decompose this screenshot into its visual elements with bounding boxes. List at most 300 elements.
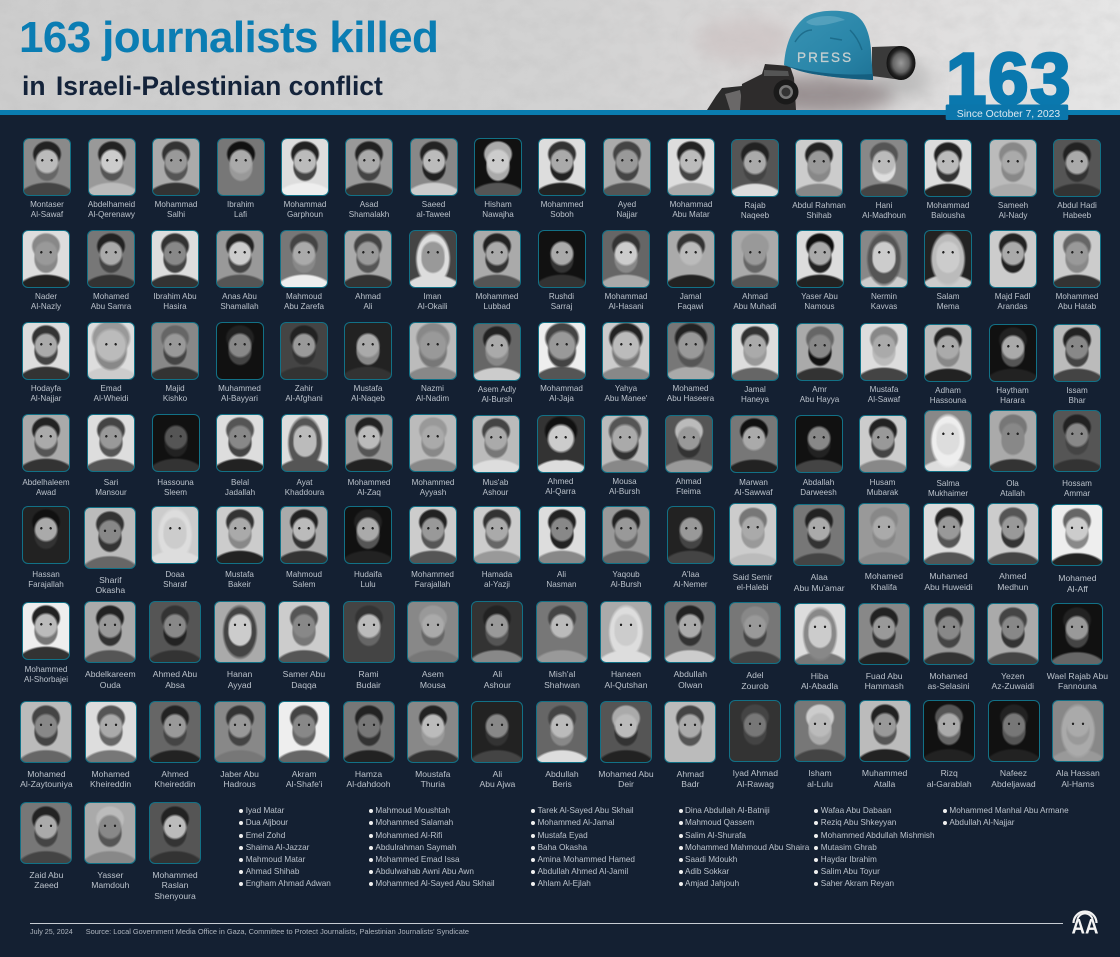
card: Nader Al-Nazly: [22, 230, 70, 310]
card: Jamal Haneya: Jamal: [744, 384, 766, 394]
card: Wael Rajab Abu Fannouna: [1051, 603, 1103, 692]
card: Salam Mema: [924, 230, 972, 311]
card: Mustafa Al-Naqeb: [344, 322, 392, 404]
card: Yezen Az-Zuwaidi: [987, 603, 1039, 692]
card: Abdelkareem Ouda: Ouda: [100, 680, 121, 690]
card: Rajab Naqeeb: Naqeeb: [741, 211, 769, 220]
card: Hassan Farajallah: Hassan: [32, 570, 60, 579]
card: Mohamed Abu Samra: [87, 230, 135, 310]
card: Majid Kishko: [151, 322, 199, 403]
card: Hisham Nawajha: Nawajha: [482, 210, 514, 218]
name list: column 5: Haydar Ibrahim: [821, 855, 877, 864]
card: Ahmad Badr: [664, 701, 716, 790]
card: Zahir Al-Afghani: Al-Afghani: [285, 394, 323, 403]
name list: column 2: Abdulrahman Saymah: [375, 843, 456, 852]
card: Mohammad Al-Hasani: [602, 230, 650, 310]
card: Moustafa Thuria: Moustafa: [415, 769, 450, 779]
card: Abdullah Olwan: Olwan: [678, 680, 702, 690]
card: Ahmed Abu Absa: Absa: [165, 680, 185, 690]
card: Asad Shamalakh: [345, 138, 393, 218]
card: Mohammed Raslan Shenyoura: Raslan: [162, 880, 188, 890]
name list: column 3: Mustafa Eyad: [538, 830, 588, 840]
card: Abdelhaleem Awad: Abdelhaleem: [22, 478, 70, 486]
card: Akram Al-Shafe'i: Al-Shafe'i: [286, 779, 322, 789]
card: Ayed Najjar: [603, 138, 651, 218]
icon: camera: [707, 64, 798, 110]
card: Mohammed Ayyash: Ayyash: [420, 488, 446, 496]
big number 163: 163: [946, 39, 1072, 120]
card: Muhammed Atalla: Atalla: [874, 778, 895, 788]
card: Hudaifa Lulu: Hudaifa: [354, 570, 382, 579]
card: Ali Ashour: [471, 601, 523, 690]
helmet label: PRESS: [797, 50, 853, 65]
card: Ahmad Ali: Ali: [364, 302, 372, 310]
card: Mohammed Al-Zaq: Mohammed: [348, 478, 390, 486]
card: Hamada al-Yazji: [473, 506, 521, 590]
card: Asem Mousa: Mousa: [420, 680, 446, 690]
card: Rami Budair: [342, 601, 394, 690]
card: Muhamed Abu Huweidi: [922, 503, 974, 592]
card: Ola Atallah: Atallah: [1000, 489, 1025, 498]
card: Ahmed Medhun: Medhun: [997, 582, 1028, 592]
card: Montaser Al-Sawaf: Montaser: [30, 200, 64, 208]
card: Ali Abu Ajwa: Abu Ajwa: [479, 779, 515, 789]
card: Muhammed Atalla: [859, 700, 911, 789]
card: Ibrahim Lafi: [217, 138, 265, 218]
card: Mustafa Al-Naqeb: Al-Naqeb: [351, 394, 385, 403]
card: Hodayfa Al-Najjar: [22, 322, 70, 403]
card: Muhammed Al-Bayyari: [216, 322, 264, 403]
card: Mohamed Kheireddin: [85, 701, 137, 790]
card: Ali Ashour: Ashour: [484, 680, 511, 690]
card: Majid Kishko: Kishko: [163, 394, 187, 403]
card: Mohamed Khalifa: [858, 503, 910, 592]
card: Abdul Rahman Shihab: Abdul Rahman: [792, 201, 846, 210]
card: Ahmed Kheireddin: Kheireddin: [154, 779, 196, 789]
name list: column 5: Saher Akram Reyan: [821, 879, 894, 888]
logo: AA: [1071, 906, 1099, 934]
card: Mohammad Salhi: Mohammad: [155, 200, 197, 208]
card: Wael Rajab Abu Fannouna: Wael Rajab Abu: [1047, 671, 1108, 681]
card: Muhammed Al-Bayyari: Al-Bayyari: [221, 394, 258, 403]
card: Mohammed Ayyash: Mohammed: [412, 478, 454, 486]
card: Nermin Kavvas: Nermin: [871, 292, 897, 301]
name list: column 1: Mahmoud Matar: [246, 855, 305, 864]
card: Salam Mema: Salam: [937, 292, 959, 301]
card: Mohamed Al-Aff: [1051, 504, 1103, 594]
card: Ahmed Abu Absa: Ahmed Abu: [153, 669, 197, 679]
card: Abdallah Darweesh: Darweesh: [800, 488, 837, 497]
name list: column 4: Mahmoud Qassem: [685, 818, 754, 827]
card: Nafeez Abdeljawad: Nafeez: [1000, 768, 1027, 778]
card: Mohammed Lubbad: Lubbad: [483, 302, 510, 310]
name list: column 3: Amina Mohammed Hamed: [538, 855, 635, 864]
card: Amr Abu Hayya: [796, 322, 844, 404]
card: Haytham Harara: Harara: [1000, 396, 1025, 405]
name list: column 5: Reziq Abu Shkeyyan: [821, 818, 896, 827]
card: Mohammed Lubbad: Mohammed: [476, 292, 518, 300]
card: Mustafa Al-Sawaf: [860, 322, 908, 404]
card: Jamal Faqawi: [667, 230, 715, 310]
card: Yaser Abu Namous: Namous: [804, 302, 835, 311]
card: Majd Fadl Arandas: Arandas: [997, 302, 1028, 311]
card: Nader Al-Nazly: Nader: [35, 292, 57, 300]
card: Muhammed Al-Bayyari: Muhammed: [218, 384, 261, 393]
name list: column 2: Mohammed Al-Sayed Abu Skhail: [375, 879, 495, 888]
card: Mohamed Abu Haseera: Mohamed: [672, 384, 708, 393]
card: Mus'ab Ashour: [472, 415, 520, 498]
card: Ibrahim Abu Hasira: Hasira: [163, 302, 187, 310]
card: Salma Mukhaimer: [924, 410, 972, 499]
card: Asem Mousa: [407, 601, 459, 690]
card: Samer Abu Daqqa: [278, 601, 330, 690]
card: Said Semir el-Halebi: [729, 503, 777, 593]
card: Hiba Al-Abadla: Hiba: [811, 671, 828, 681]
card: Ayat Khaddoura: Khaddoura: [285, 488, 324, 496]
card: Nazmi Al-Nadim: Al-Nadim: [416, 394, 449, 403]
card: Haytham Harara: Haytham: [996, 386, 1029, 395]
card: Abdullah Olwan: [664, 601, 716, 690]
card: Mohamed Abu Deir: [600, 701, 652, 790]
card: Mish'al Shahwan: [536, 601, 588, 690]
card: Mustafa Al-Naqeb: Mustafa: [354, 384, 382, 393]
card: Hanan Ayyad: Ayyad: [228, 680, 251, 690]
card: Mohammed Lubbad: [473, 230, 521, 310]
card: Mohamed Abu Deir: Deir: [618, 779, 634, 789]
card: Sari Mansour: [87, 414, 135, 498]
card: Abdelhameid Al-Qerenawy: [88, 138, 136, 218]
card: Yaqoub Al-Bursh: Yaqoub: [612, 570, 640, 579]
card: Hassan Farajallah: Farajallah: [28, 580, 64, 589]
card: Mohammed Al-Shorbajei: [22, 602, 70, 685]
card: Mohammad Abu Matar: [667, 138, 715, 218]
card: Abdelkareem Ouda: Abdelkareem: [85, 669, 136, 679]
name list: column 4: Dina Abdullah Al-Batniji: [685, 806, 770, 815]
card: Saeed al-Taweel: [410, 138, 458, 218]
card: Rizq al-Garablah: [923, 700, 975, 789]
card: Nazmi Al-Nadim: [408, 322, 456, 404]
name list: column 2: Mohammed Al-Rifi: [375, 830, 442, 840]
card: Abdul Rahman Shihab: [792, 139, 846, 220]
card: Fuad Abu Hammash: Fuad Abu: [866, 671, 903, 681]
card: Samer Abu Daqqa: Samer Abu: [283, 669, 325, 679]
card: Sharif Okasha: Sharif: [99, 575, 122, 585]
name list: column 3: Mohammed Al-Jamal: [538, 818, 614, 827]
card: Montaser Al-Sawaf: [23, 138, 71, 218]
card: Iman Al-Okaili: Iman: [424, 292, 442, 300]
card: Sharif Okasha: [84, 507, 136, 596]
since date badge: [946, 104, 1068, 120]
card: Mohammed Al-Shorbajei: Mohammed: [25, 665, 67, 674]
card: Mohammad Al-Jaja: Al-Jaja: [549, 394, 574, 403]
card: Mohammed Raslan Shenyoura: [149, 802, 201, 901]
card: Asad Shamalakh: Shamalakh: [349, 210, 389, 218]
card: Nader Al-Nazly: Al-Nazly: [31, 302, 61, 310]
card: Ayat Khaddoura: [280, 414, 328, 498]
card: Isham al-Lulu: Isham: [808, 768, 832, 778]
card: Abdullah Beris: Beris: [552, 779, 572, 789]
card: Mohammed Raslan Shenyoura: Mohammed: [152, 870, 198, 880]
card: Ali Ashour: Ali: [493, 669, 502, 679]
card: Salam Mema: Mema: [937, 302, 959, 311]
card: Hassouna Sleem: Hassouna: [157, 478, 194, 486]
card: Mahmoud Salem: Salem: [293, 580, 315, 589]
card: Saeed al-Taweel: Saeed: [422, 200, 445, 208]
card: Mohammad Balousha: Mohammad: [927, 201, 969, 210]
card: Sari Mansour: Sari: [104, 478, 118, 486]
card: Moustafa Thuria: Thuria: [421, 779, 445, 789]
card: Abdullah Beris: [536, 701, 588, 790]
card: Mohamed Abu Samra: Mohamed: [93, 292, 129, 300]
card: Mohammad Balousha: [924, 139, 972, 220]
card: Ahmad Fteima: [664, 415, 712, 497]
card: Asem Adly Al-Bursh: [473, 323, 521, 405]
name list: column 2: [375, 805, 495, 890]
card: Mohammed Abu Hatab: Abu Hatab: [1058, 302, 1096, 311]
card: Mohamed Abu Samra: Abu Samra: [91, 302, 131, 310]
card: Mus'ab Ashour: Ashour: [483, 488, 508, 497]
card: Issam Bhar: Issam: [1066, 386, 1088, 395]
card: Ahmad Fteima: Fteima: [676, 487, 701, 496]
card: Mohamed as-Selasini: [922, 603, 974, 692]
card: Mohamed as-Selasini: Mohamed: [929, 671, 968, 681]
card: Yaser Abu Namous: Yaser Abu: [801, 292, 838, 301]
card: Mohammed Farajallah: Mohammed: [411, 570, 454, 579]
card: Mahmoud Abu Zarefa: Abu Zarefa: [284, 302, 324, 310]
name list: column 5: [821, 805, 935, 890]
card: Said Semir el-Halebi: Said Semir: [733, 573, 772, 582]
card: Emad Al-Wheidi: Emad: [100, 384, 122, 393]
card: Iyad Ahmad Al-Rawag: Iyad Ahmad: [733, 768, 778, 778]
card: Montaser Al-Sawaf: Al-Sawaf: [31, 210, 63, 218]
card: Hossam Ammar: Ammar: [1064, 489, 1090, 498]
card: Jaber Abu Hadrous: Jaber Abu: [220, 769, 259, 779]
name list: column 2: Mohammed Emad Issa: [375, 855, 460, 864]
card: Mohamed Khalifa: Khalifa: [871, 582, 897, 592]
card: Mohammad Garphoun: [281, 138, 329, 218]
card: Abdelkareem Ouda: [84, 601, 136, 690]
card: Abdullah Beris: Abdullah: [545, 769, 579, 779]
card: Zaid Abu Zaeed: [20, 802, 72, 891]
name list: column 4: Amjad Jahjouh: [685, 879, 739, 888]
card: Mahmoud Salem: [280, 506, 328, 590]
card: Majd Fadl Arandas: Majd Fadl: [995, 292, 1030, 301]
card: Jamal Faqawi: Jamal: [680, 292, 701, 300]
card: Mohammed Al-Zaq: Al-Zaq: [357, 488, 381, 496]
name list: column 5: Mutasim Ghrab: [821, 843, 877, 852]
card: Husam Mubarak: Mubarak: [867, 488, 898, 497]
card: Rami Budair: Budair: [356, 680, 381, 690]
card: Mohamed Abu Haseera: [666, 322, 714, 404]
card: Samer Abu Daqqa: Daqqa: [291, 680, 317, 690]
card: Ahmad Abu Muhadi: Ahmad: [742, 292, 768, 301]
card: Sari Mansour: Mansour: [95, 488, 127, 496]
card: Ahmed Medhun: [987, 503, 1039, 592]
card: Husam Mubarak: Husam: [870, 478, 895, 487]
card: Yahya Abu Manee': [602, 322, 650, 404]
card: Muhamed Abu Huweidi: Muhamed: [929, 571, 968, 581]
card: Rajab Naqeeb: [731, 139, 779, 220]
card: Abdul Hadi Habeeb: [1053, 139, 1101, 220]
card: Hisham Nawajha: [474, 138, 522, 218]
card: Anas Abu Shamallah: Anas Abu: [222, 292, 257, 300]
card: Yaqoub Al-Bursh: Al-Bursh: [610, 580, 642, 589]
card: Said Semir el-Halebi: el-Halebi: [737, 583, 769, 592]
card: Mohammed Al-Shorbajei: Al-Shorbajei: [24, 675, 68, 684]
name list: column 2: Mahmoud Moushtah: [375, 806, 450, 815]
card: Ahmed Kheireddin: [149, 701, 201, 790]
card: Husam Mubarak: [858, 415, 906, 498]
card: Asad Shamalakh: Asad: [360, 200, 378, 208]
blue divider bar: [0, 110, 1120, 115]
name list: column 4: Salim Al-Shurafa: [685, 830, 746, 840]
card: Marwan Al-Sawwaf: [730, 415, 778, 498]
card: Yaser Abu Namous: [796, 230, 844, 311]
card: Mohammad Salhi: Salhi: [167, 210, 185, 218]
card: Yasser Mamdouh: Yasser: [97, 870, 123, 880]
card: Ibrahim Lafi: Lafi: [234, 210, 247, 218]
card: Ala Hassan Al-Hams: [1052, 700, 1104, 789]
name list: column 3: Tarek Al-Sayed Abu Skhail: [538, 806, 634, 815]
card: Mahmoud Salem: Mahmoud: [286, 570, 322, 579]
card: Adham Hassouna: Hassouna: [930, 396, 966, 405]
card: Mohammed Abu Hatab: Mohammed: [1056, 292, 1098, 301]
name list: column 6: Abdullah Al-Najjar: [949, 818, 1014, 827]
name list: column 1: Iyad Matar: [246, 806, 284, 815]
card: Haneen Al-Qutshan: Haneen: [611, 669, 641, 679]
icon: press helmet: [784, 11, 873, 80]
card: Sameeh Al-Nady: Sameeh: [998, 201, 1028, 210]
card: Issam Bhar: Bhar: [1068, 396, 1086, 405]
card: Mohamed Al-Aff: Al-Aff: [1067, 584, 1088, 594]
card: Belal Jadallah: [216, 414, 264, 498]
card: Hisham Nawajha: Hisham: [484, 200, 512, 208]
card: Ali Abu Ajwa: Ali: [493, 769, 502, 779]
name list: column 4: Adib Sokkar: [685, 867, 729, 876]
card: Jaber Abu Hadrous: Hadrous: [223, 779, 256, 789]
card: Mohamed as-Selasini: as-Selasini: [927, 681, 970, 691]
card: Akram Al-Shafe'i: Akram: [292, 769, 317, 779]
card: Akram Al-Shafe'i: [278, 701, 330, 790]
card: Hodayfa Al-Najjar: Hodayfa: [31, 384, 61, 393]
card: Ahmad Abu Muhadi: [731, 230, 779, 311]
card: Wael Rajab Abu Fannouna: Fannouna: [1058, 681, 1097, 691]
card: Nermin Kavvas: [860, 230, 908, 311]
card: Abdul Hadi Habeeb: Abdul Hadi: [1057, 201, 1097, 210]
card: Isham al-Lulu: al-Lulu: [807, 778, 833, 788]
card: Mish'al Shahwan: Shahwan: [544, 680, 580, 690]
footer date: July 25, 2024: [30, 927, 73, 936]
card: Adham Hassouna: [924, 324, 972, 406]
card: Mohamed Al-Zaytouniya: Al-Zaytouniya: [20, 779, 73, 789]
card: Mish'al Shahwan: Mish'al: [549, 669, 575, 679]
name list: column 2: Abdulwahab Awni Abu Awn: [375, 867, 474, 876]
name list: column 1: Emel Zohd: [246, 830, 285, 840]
card: Ali Abu Ajwa: [471, 701, 523, 790]
subtitle: in Israeli-Palestinian conflict: [22, 71, 383, 101]
card: Ahmed Al-Qarra: Ahmed: [548, 477, 573, 486]
card: Ayat Khaddoura: Ayat: [296, 478, 313, 486]
card: Salma Mukhaimer: Mukhaimer: [928, 489, 968, 498]
card: Hamza Al-dahdooh: Hamza: [355, 769, 382, 779]
card: Ali Nasman: Nasman: [546, 580, 577, 589]
card: Zahir Al-Afghani: [280, 322, 328, 403]
card: Mohammed Abu Hatab: [1053, 230, 1101, 311]
card: Jaber Abu Hadrous: [214, 701, 266, 790]
card: Yahya Abu Manee': Yahya: [615, 384, 637, 393]
card: Abdelhaleem Awad: [22, 414, 70, 498]
card: Ahmad Ali: Ahmad: [355, 292, 381, 300]
name list: column 3: [538, 805, 635, 890]
card: Mohamed Abu Haseera: Abu Haseera: [667, 394, 714, 403]
name list: column 5: Salim Abu Toyur: [821, 867, 880, 876]
card: Ala Hassan Al-Hams: Ala Hassan: [1056, 768, 1100, 778]
card: Muhammed Atalla: Muhammed: [862, 768, 907, 778]
card: Hiba Al-Abadla: Al-Abadla: [801, 681, 838, 691]
card: Yasser Mamdouh: [84, 802, 136, 891]
card: Mohammad Garphoun: Garphoun: [287, 210, 323, 218]
card: Alaa Abu Mu'amar: [793, 504, 845, 593]
card: Yahya Abu Manee': Abu Manee': [605, 394, 647, 403]
card: Abdul Hadi Habeeb: Habeeb: [1063, 211, 1091, 220]
card: Nermin Kavvas: Kavvas: [871, 302, 897, 311]
card: Ahmed Medhun: Ahmed: [999, 571, 1026, 581]
card: Mohamed Al-Aff: Mohamed: [1058, 573, 1096, 583]
card: Majid Kishko: Majid: [165, 384, 185, 393]
card: Alaa Abu Mu'amar: Alaa: [811, 572, 828, 582]
card: Haneen Al-Qutshan: Al-Qutshan: [604, 680, 648, 690]
card: Hudaifa Lulu: Lulu: [360, 580, 376, 589]
card: Rami Budair: Rami: [358, 669, 379, 679]
card: Mohamed Kheireddin: Mohamed: [91, 769, 130, 779]
card: Adham Hassouna: Adham: [935, 386, 961, 395]
name list: column 3: Abdullah Ahmed Al-Jamil: [538, 867, 628, 876]
card: Haytham Harara: [988, 324, 1036, 406]
card: Mousa Al-Bursh: [600, 415, 648, 497]
card: Abdallah Darweesh: Abdallah: [803, 478, 834, 487]
card: Rushdi Sarraj: Rushdi: [549, 292, 574, 300]
name list: column 4: Mohammed Mahmoud Abu Shaira: [685, 843, 809, 852]
name list: column 1: Engham Ahmad Adwan: [246, 879, 331, 888]
header banner: [0, 0, 1120, 120]
card: Adel Zourob: Adel: [746, 670, 764, 680]
card: A'laa Al-Nemer: [666, 506, 714, 590]
card: Sharif Okasha: Okasha: [95, 585, 125, 595]
card: Fuad Abu Hammash: [858, 603, 910, 692]
card: Hudaifa Lulu: [344, 506, 392, 590]
card: Jamal Haneya: [731, 322, 779, 404]
name list: column 2: Mohammed Salamah: [375, 818, 453, 827]
card: Zaid Abu Zaeed: Zaid Abu: [29, 870, 63, 880]
card: Zaid Abu Zaeed: Zaeed: [34, 880, 59, 890]
title: 163 journalists killed: [19, 13, 438, 62]
card: Ahmad Ali: [344, 230, 392, 310]
card: Abdullah Olwan: Abdullah: [674, 669, 707, 679]
card: Nafeez Abdeljawad: [988, 700, 1040, 789]
name list: column 4: Saadi Mdoukh: [685, 855, 737, 864]
card: Mohammed Ayyash: [409, 414, 457, 498]
card: Marwan Al-Sawwaf: Marwan: [739, 478, 768, 487]
card: Saeed al-Taweel: al-Taweel: [416, 210, 451, 218]
card: Hassouna Sleem: Sleem: [164, 488, 187, 496]
footer source: Source: Local Government Media Office in Gaza, Committee to Protect Journalists, Palestinian Journalists' Syndicate: [86, 927, 469, 936]
card: Hamza Al-dahdooh: Al-dahdooh: [347, 779, 390, 789]
card: Mohamed Al-Zaytouniya: [20, 701, 72, 790]
card: Ahmed Abu Absa: [149, 601, 201, 690]
card: Mustafa Bakeir: Mustafa: [225, 570, 254, 579]
card: Mustafa Bakeir: [216, 506, 264, 590]
card: Mahmoud Abu Zarefa: [280, 230, 328, 310]
